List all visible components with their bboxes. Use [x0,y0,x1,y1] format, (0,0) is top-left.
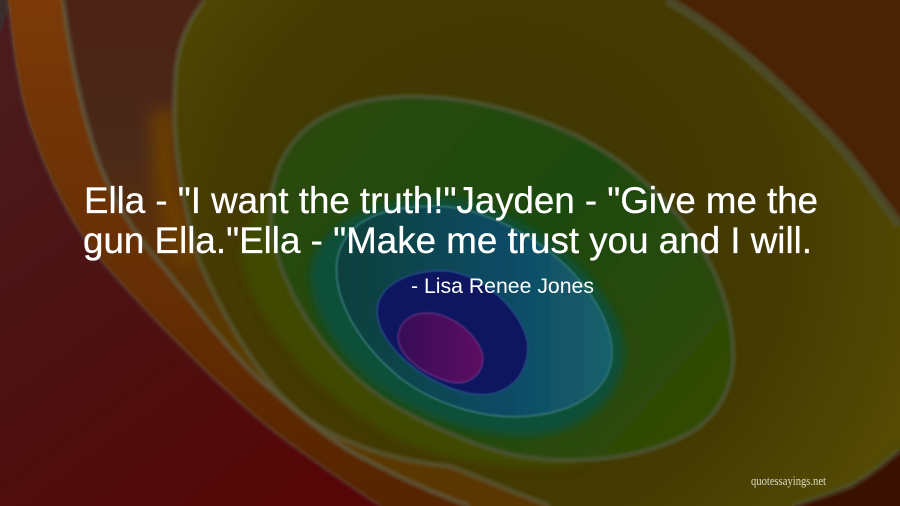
purple centre [398,313,483,383]
top right brown corner [640,0,900,300]
quote text: gun Ella."Ella - "Make me trust you and I will. [83,220,812,261]
green bowl [270,96,733,460]
bottom right dark corner [780,440,900,506]
green-teal halo [310,198,624,436]
quote text [83,180,818,261]
quote text: Ella - "I want the truth!"Jayden - "Give me the [84,180,818,221]
teal bowl [336,206,612,417]
attribution: - Lisa Renee Jones [411,275,594,298]
olive-green crescent [242,190,583,467]
blue bowl [377,271,528,395]
amber glow beside olive bowl [164,110,190,265]
watermark: quotessayings.net [751,473,826,488]
top-left corner shade [0,0,12,34]
